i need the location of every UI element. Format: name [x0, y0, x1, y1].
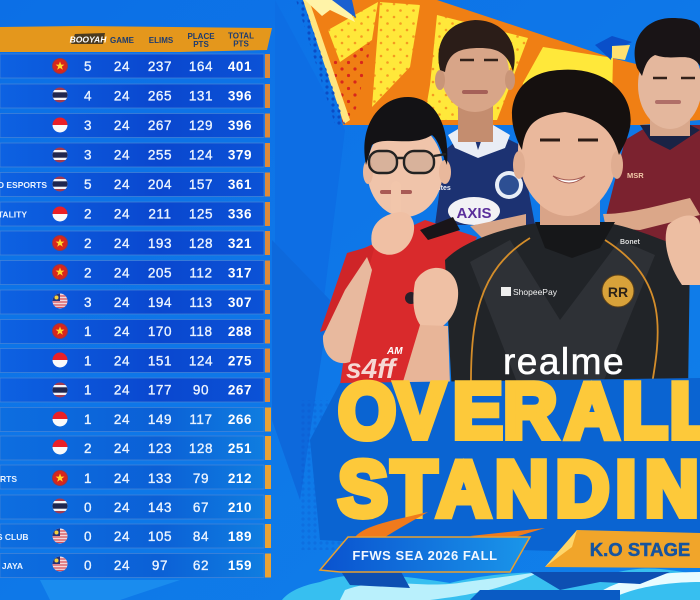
row 7: 128 — [189, 236, 213, 251]
row 1 — [0, 54, 270, 78]
row 3: 24 — [114, 118, 130, 133]
row 6: 211 — [148, 206, 172, 222]
row 9: 3 — [84, 295, 92, 310]
row 11 — [0, 348, 270, 372]
row 18: 62 — [193, 558, 209, 573]
row 10: 118 — [189, 324, 213, 339]
row 2: 131 — [189, 88, 213, 104]
row 1: 401 — [228, 59, 252, 74]
row 15 — [0, 465, 271, 489]
row 12: 90 — [193, 382, 209, 398]
table header: PLACE — [187, 32, 215, 41]
sponsors: ShopeePay — [513, 287, 558, 297]
table header: PTS — [233, 40, 249, 48]
row 5: 204 — [148, 177, 172, 192]
row 18: 97 — [152, 558, 168, 573]
row 16: 0 — [84, 500, 92, 515]
row 8: 112 — [189, 266, 213, 280]
row 3: 267 — [148, 118, 172, 133]
row 3: 396 — [228, 118, 252, 133]
row 14: 2 — [84, 441, 92, 456]
row 5: 24 — [114, 177, 130, 192]
table header: TOTAL — [228, 32, 254, 40]
row 8: 317 — [228, 266, 252, 280]
row 15: 212 — [228, 471, 252, 486]
row 17 — [0, 524, 271, 548]
sponsor: AXIS: AXIS — [456, 205, 492, 222]
row 8: 24 — [114, 266, 130, 280]
row 5: 5 — [84, 177, 92, 192]
row 6 — [0, 202, 270, 226]
row 17: 105 — [148, 529, 172, 544]
badge: K.O stage — [545, 530, 700, 568]
row 10: 1 — [84, 324, 92, 339]
jersey text: s4ff — [346, 353, 398, 384]
row 6: 2 — [84, 206, 92, 222]
player: back right, maroon jersey: MSR — [627, 171, 644, 180]
badge: K.O stage: K.O STAGE — [590, 539, 690, 560]
row 4: 379 — [228, 148, 252, 162]
row 14: 251 — [228, 441, 252, 456]
row 6: 125 — [189, 206, 213, 222]
row 17: 0 — [84, 529, 92, 544]
row 2: 24 — [114, 88, 130, 104]
row 9: 307 — [228, 295, 252, 310]
sponsor: AXIS — [448, 197, 500, 225]
row 12 — [0, 378, 270, 402]
row 16 — [0, 495, 271, 519]
row 4: 255 — [148, 148, 172, 162]
row 3 — [0, 114, 270, 138]
team badge: RR — [608, 284, 628, 300]
glasses — [369, 151, 446, 173]
bottom wave decoration — [282, 512, 700, 600]
row 7: 193 — [148, 236, 172, 251]
row 14: 128 — [189, 441, 213, 456]
row 5: 361 — [228, 177, 252, 192]
row 9 — [0, 290, 270, 314]
row 11: 151 — [148, 354, 172, 368]
row 13: 117 — [189, 412, 213, 427]
row 8 — [0, 260, 270, 284]
row 9: 24 — [114, 295, 130, 310]
row 7 — [0, 231, 270, 255]
row 11: 275 — [228, 354, 252, 368]
booyah label: BOOYAH — [70, 34, 107, 44]
row 18: 159 — [228, 558, 252, 573]
row 18 — [0, 554, 271, 578]
row 3: 3 — [84, 118, 92, 133]
player: back right, maroon jersey — [600, 18, 700, 260]
player: front left, red jersey — [320, 97, 477, 385]
row 5: 157 — [189, 177, 213, 192]
player: back centre, navy jersey — [435, 20, 535, 238]
table header: PTS — [193, 40, 209, 49]
row 10: 24 — [114, 324, 130, 339]
jersey text: AM — [386, 346, 403, 357]
row 12: 267 — [228, 382, 252, 398]
row 9: 194 — [148, 295, 172, 310]
row 18: 0 — [84, 558, 92, 573]
row 4: 24 — [114, 148, 130, 162]
row 15: RTS — [0, 474, 17, 484]
row 15: 79 — [193, 471, 209, 486]
fist — [402, 268, 458, 385]
row 5 — [0, 172, 270, 196]
row 15: 1 — [84, 471, 92, 486]
row 16: 210 — [228, 500, 252, 515]
row 17: 189 — [228, 529, 252, 544]
row 17: 24 — [114, 529, 130, 544]
row 12: 24 — [114, 382, 130, 398]
row 7: 321 — [228, 236, 252, 251]
row 10: 288 — [228, 324, 252, 339]
jersey badge — [495, 171, 523, 199]
row 2 — [0, 84, 270, 108]
row 2: 396 — [228, 88, 252, 104]
row 15: 24 — [114, 471, 130, 486]
row 1: 5 — [84, 59, 92, 74]
row 16: 143 — [148, 500, 172, 515]
row 11: 1 — [84, 354, 92, 368]
row 9: 113 — [189, 295, 213, 310]
row 13: 266 — [228, 412, 252, 427]
row 10: 170 — [148, 324, 172, 339]
row 10 — [0, 320, 270, 344]
table header — [0, 26, 272, 52]
row 13: 1 — [84, 412, 92, 427]
title: overall standings — [338, 368, 700, 533]
title backing shape — [310, 378, 700, 555]
badge: FFWS SEA 2026 Fall — [320, 537, 530, 572]
row 2: 265 — [148, 88, 172, 104]
row 4: 3 — [84, 148, 92, 162]
row 1: 24 — [114, 59, 130, 74]
player: front centre, black jersey — [402, 70, 700, 395]
player: front centre, black jersey: Bonet — [620, 239, 640, 246]
row 11: 24 — [114, 354, 130, 368]
row 7: 2 — [84, 236, 92, 251]
row 16: 24 — [114, 500, 130, 515]
row 13: 24 — [114, 412, 130, 427]
row 4: 124 — [189, 148, 213, 162]
standings table — [0, 26, 272, 578]
row 17: 84 — [193, 529, 209, 544]
table header: ELIMS — [149, 36, 174, 45]
row 11: 124 — [189, 354, 213, 368]
row 3: 129 — [189, 118, 213, 133]
row 8: 2 — [84, 266, 92, 280]
comic banner behind players — [296, 0, 700, 128]
row 4 — [0, 143, 270, 167]
row 12: 1 — [84, 382, 92, 398]
player: front centre, black jersey: realme — [503, 341, 625, 382]
row 12: 177 — [148, 382, 172, 398]
row 6: 24 — [114, 206, 130, 222]
row 18: JAYA — [2, 561, 23, 571]
row 8: 205 — [148, 266, 172, 280]
row 15: 133 — [148, 471, 172, 486]
team badge — [602, 275, 634, 307]
row 6: 336 — [228, 206, 252, 222]
row 1: 164 — [189, 59, 213, 74]
row 14: 123 — [148, 441, 172, 456]
row 2: 4 — [84, 88, 92, 104]
row 14: 24 — [114, 441, 130, 456]
row 13 — [0, 408, 271, 432]
row 14 — [0, 436, 271, 460]
row 7: 24 — [114, 236, 130, 251]
row 13: 149 — [148, 412, 172, 427]
player: back centre, navy jersey: rites — [436, 185, 451, 192]
row 16: 67 — [193, 500, 209, 515]
badge: FFWS SEA 2026 Fall: FFWS SEA 2026 FALL — [352, 548, 498, 563]
row 18: 24 — [114, 558, 130, 573]
table header: GAME — [110, 36, 135, 45]
row 1: 237 — [148, 59, 172, 74]
